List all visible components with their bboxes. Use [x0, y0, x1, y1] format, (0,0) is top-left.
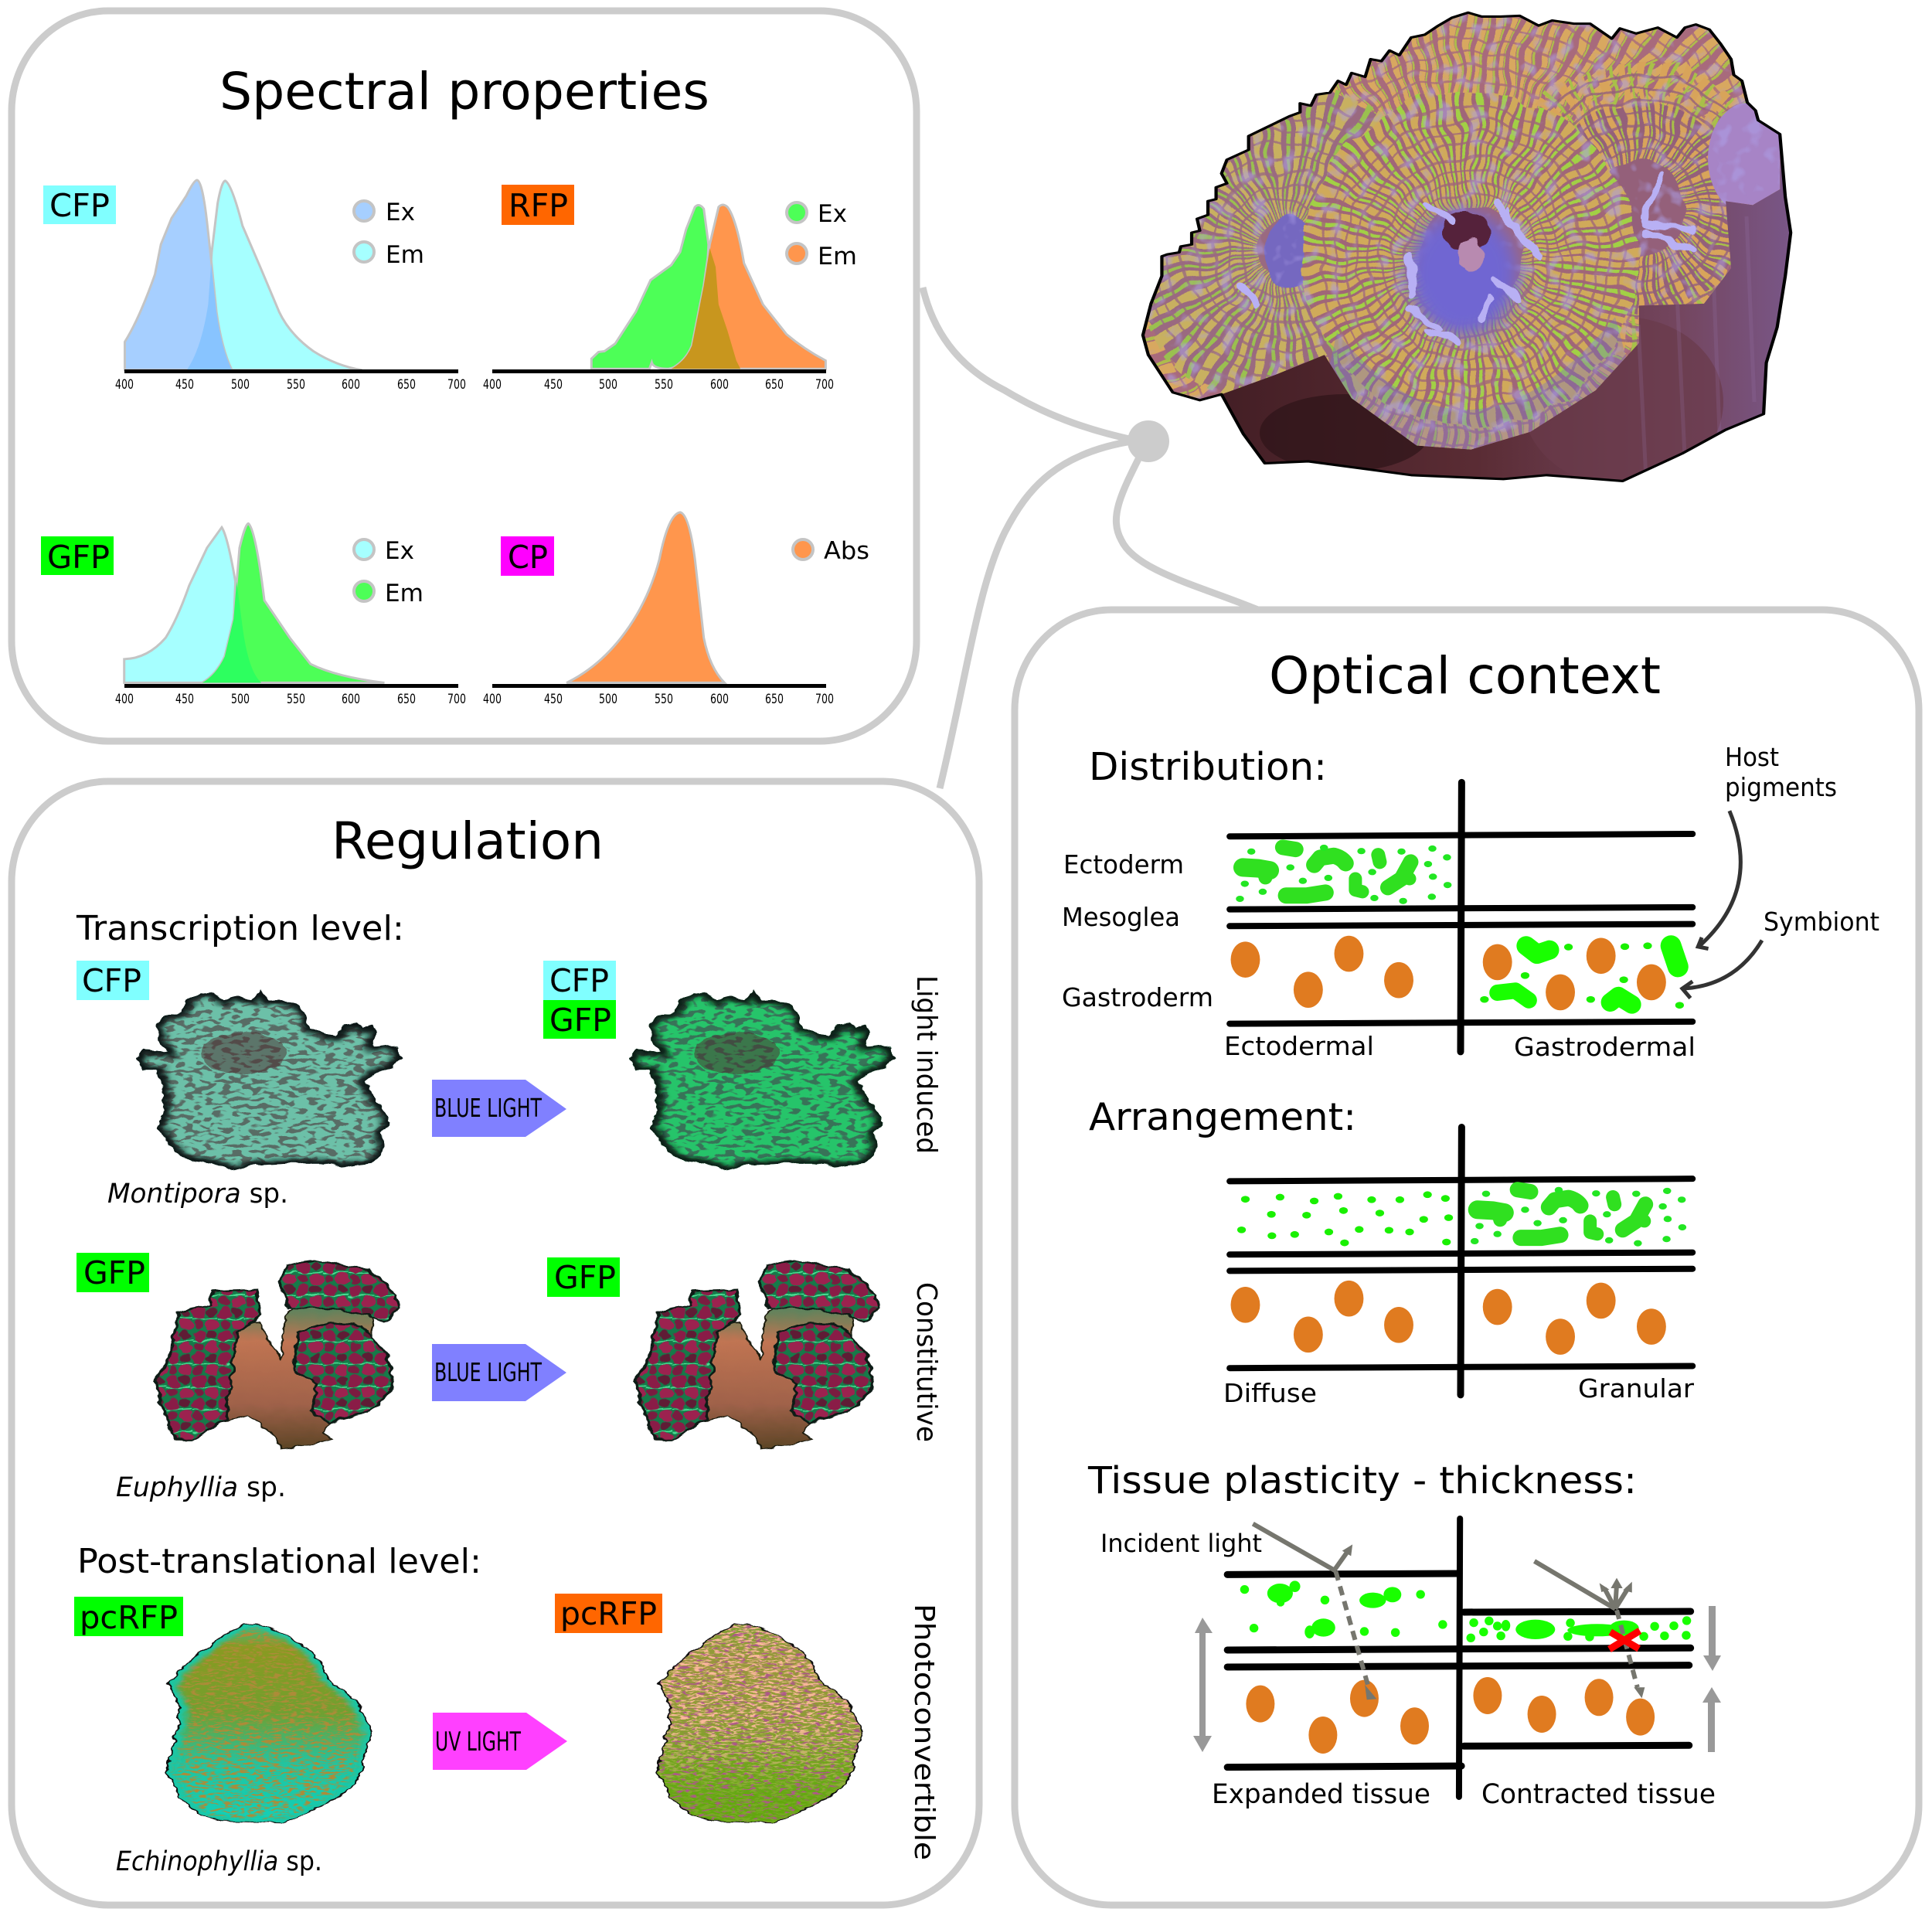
species label: Euphyllia: Euphyllia sp. — [116, 1472, 286, 1503]
connector: spectral properties to node — [923, 288, 1136, 441]
tick labels: 650 — [397, 692, 416, 706]
panel frame — [12, 781, 979, 1905]
tag: CFP and GFP after blue light — [543, 961, 616, 1039]
tick labels: 550 — [655, 377, 673, 392]
tick labels — [483, 692, 834, 706]
panel: optical context — [1015, 610, 1919, 1905]
tick labels: 550 — [287, 377, 305, 392]
legend: GFP: Em — [385, 580, 423, 607]
tick labels: 450 — [544, 692, 563, 706]
host pigments: expanded tissue — [1240, 1580, 1447, 1638]
arrow: blue light 2: BLUE LIGHT — [434, 1357, 543, 1387]
red cross: light blocked — [1609, 1631, 1640, 1649]
tick labels: 550 — [655, 692, 673, 706]
symbionts — [1246, 1677, 1655, 1754]
arrow: blue light 1: BLUE LIGHT — [434, 1093, 543, 1123]
subheading: arrangement: Arrangement: — [1089, 1095, 1356, 1139]
panel: regulation — [12, 781, 979, 1905]
host pigments: ectodermal granular — [1236, 845, 1451, 904]
diagram: distribution — [1062, 742, 1879, 1062]
tick labels: 500 — [231, 377, 250, 392]
coral rock base — [1223, 152, 1790, 480]
tag: GFP left: GFP — [83, 1254, 145, 1291]
tick labels: 600 — [710, 377, 729, 392]
legend: CFP: Ex — [386, 199, 415, 226]
tick labels: 400 — [483, 377, 502, 392]
arrow: blue light 1 — [432, 1080, 566, 1137]
legend: CFP — [354, 199, 424, 269]
labels: distribution: Ectodermal — [1224, 1031, 1374, 1061]
axis — [124, 369, 458, 373]
tick labels: 600 — [342, 692, 360, 706]
illustration: coral photograph — [1141, 11, 1793, 482]
tag: CFP before blue light: CFP — [82, 962, 141, 999]
tick labels — [115, 377, 466, 392]
tag: CFP: CFP — [49, 187, 110, 224]
axis — [492, 369, 826, 373]
labels: distribution: Gastrodermal — [1514, 1032, 1696, 1062]
label: contracted tissue: Contracted tissue — [1481, 1779, 1716, 1810]
species label: Echinophyllia: Echinophyllia sp. — [116, 1846, 322, 1877]
arrow: contracted downward — [1703, 1606, 1721, 1671]
chart: GFP — [41, 523, 466, 706]
connector: optical context to node — [1116, 456, 1264, 612]
side label: constitutive: Constitutive — [910, 1282, 942, 1442]
curves: RFP excitation and emission — [591, 205, 825, 369]
tag: pcRFP orange: pcRFP — [560, 1595, 657, 1632]
side label: light induced: Light induced — [910, 975, 942, 1154]
photo: Euphyllia before — [155, 1261, 399, 1450]
arrow: host pigments — [1698, 811, 1740, 949]
photo: Echinophyllia after — [649, 1621, 870, 1826]
tick labels: 650 — [397, 377, 416, 392]
label: granular: Granular — [1578, 1373, 1694, 1404]
curves: CFP excitation and emission — [124, 180, 362, 370]
legend: GFP — [354, 537, 423, 607]
label: expanded tissue: Expanded tissue — [1212, 1779, 1430, 1810]
host pigments: granular — [1471, 1187, 1686, 1247]
arrow: UV light: UV LIGHT — [435, 1727, 521, 1757]
photo: Montipora after — [623, 985, 900, 1174]
tick labels: 500 — [599, 692, 617, 706]
connector: regulation to node — [940, 441, 1136, 788]
light arrows: contracted tissue — [1535, 1561, 1645, 1698]
arrow: expanded thickness — [1193, 1618, 1213, 1752]
curves: GFP excitation and emission — [124, 523, 384, 682]
arrow: blue light 2 — [432, 1344, 566, 1401]
tag: GFP right: GFP — [554, 1259, 616, 1296]
diagram: tissue plasticity — [1100, 1519, 1721, 1810]
tissue layer lines — [1230, 1127, 1692, 1395]
heading: optical context: Optical context — [1269, 646, 1661, 706]
legend: CP — [793, 537, 869, 565]
tick labels: 450 — [175, 377, 194, 392]
coral polyps and ridges — [1145, 14, 1781, 450]
coral outline — [1143, 12, 1791, 481]
arrow: UV light — [433, 1713, 567, 1770]
tick labels: 650 — [765, 377, 784, 392]
subheading: tissue plasticity: Tissue plasticity - thickness: — [1087, 1459, 1637, 1502]
tick labels: 400 — [115, 692, 134, 706]
chart: CFP — [43, 180, 466, 392]
host pigments: diffuse — [1237, 1191, 1453, 1246]
heading: regulation: Regulation — [332, 811, 604, 871]
panel frame — [12, 11, 917, 741]
tissue layer lines — [1227, 1519, 1691, 1797]
legend: CFP: Em — [386, 241, 424, 269]
labels: distribution: Host — [1725, 742, 1779, 772]
labels: distribution: Ectoderm — [1063, 849, 1184, 880]
legend: GFP: Ex — [385, 537, 414, 565]
legend: RFP: Em — [818, 243, 857, 270]
tag: CFP and GFP after blue light: GFP — [549, 1002, 611, 1039]
tag: CP: CP — [508, 539, 548, 576]
side label: photoconvertible: Photoconvertible — [908, 1604, 940, 1860]
tick labels: 700 — [447, 377, 466, 392]
coral oral disc — [1240, 174, 1692, 340]
diagram: arrangement — [1223, 1127, 1694, 1408]
panel frame — [1015, 610, 1919, 1905]
photo: Echinophyllia before — [158, 1621, 379, 1826]
light arrows: expanded tissue — [1253, 1524, 1376, 1700]
panel: spectral properties — [12, 11, 917, 741]
tick labels: 600 — [710, 692, 729, 706]
photo: Euphyllia after — [635, 1261, 879, 1450]
labels: distribution — [1062, 742, 1879, 1062]
label: diffuse: Diffuse — [1223, 1378, 1317, 1408]
tick labels: 400 — [115, 377, 134, 392]
tick labels: 700 — [815, 377, 834, 392]
host pigments: gastrodermal — [1480, 942, 1684, 1009]
labels: distribution: Gastroderm — [1062, 982, 1213, 1012]
legend: RFP — [787, 200, 857, 270]
tick labels: 550 — [287, 692, 305, 706]
tick labels — [115, 692, 466, 706]
tick labels: 700 — [447, 692, 466, 706]
tick labels: 500 — [231, 692, 250, 706]
tick labels: 400 — [483, 692, 502, 706]
tick labels: 500 — [599, 377, 617, 392]
tick labels: 450 — [175, 692, 194, 706]
chart: RFP — [483, 185, 857, 392]
arrow: contracted upward — [1702, 1687, 1721, 1752]
symbionts — [1231, 1281, 1666, 1355]
tick labels: 450 — [544, 377, 563, 392]
tick labels: 700 — [815, 692, 834, 706]
tick labels: 650 — [765, 692, 784, 706]
subheading: transcription level: Transcription level: — [76, 909, 404, 948]
connector node — [1128, 420, 1169, 462]
arrow: symbiont — [1682, 941, 1762, 999]
axis — [492, 684, 826, 688]
labels: distribution: Mesoglea — [1062, 902, 1180, 932]
species label: Montipora: Montipora sp. — [107, 1179, 288, 1210]
subheading: post-translational level: Post-translational level: — [77, 1542, 481, 1581]
tag: RFP: RFP — [509, 187, 568, 224]
tag: GFP: GFP — [47, 539, 110, 576]
photo: Montipora before — [130, 985, 407, 1174]
heading: spectral properties: Spectral properties — [219, 62, 709, 121]
tick labels — [483, 377, 834, 392]
legend: CP: Abs — [824, 537, 869, 565]
symbionts — [1231, 936, 1666, 1010]
label: incident light: Incident light — [1100, 1529, 1262, 1558]
tissue layer lines — [1230, 782, 1692, 1052]
axis — [124, 684, 458, 688]
legend: RFP: Ex — [818, 200, 847, 228]
subheading: distribution: Distribution: — [1089, 745, 1327, 789]
labels: distribution: Symbiont — [1764, 907, 1879, 937]
labels: distribution: pigments — [1725, 772, 1837, 802]
chart: CP — [483, 512, 869, 706]
tag: pcRFP green: pcRFP — [80, 1599, 178, 1636]
tick labels: 600 — [342, 377, 360, 392]
curve: CP absorbance — [566, 512, 724, 682]
tag: CFP and GFP after blue light: CFP — [549, 962, 609, 999]
host pigments: contracted tissue — [1466, 1616, 1691, 1642]
